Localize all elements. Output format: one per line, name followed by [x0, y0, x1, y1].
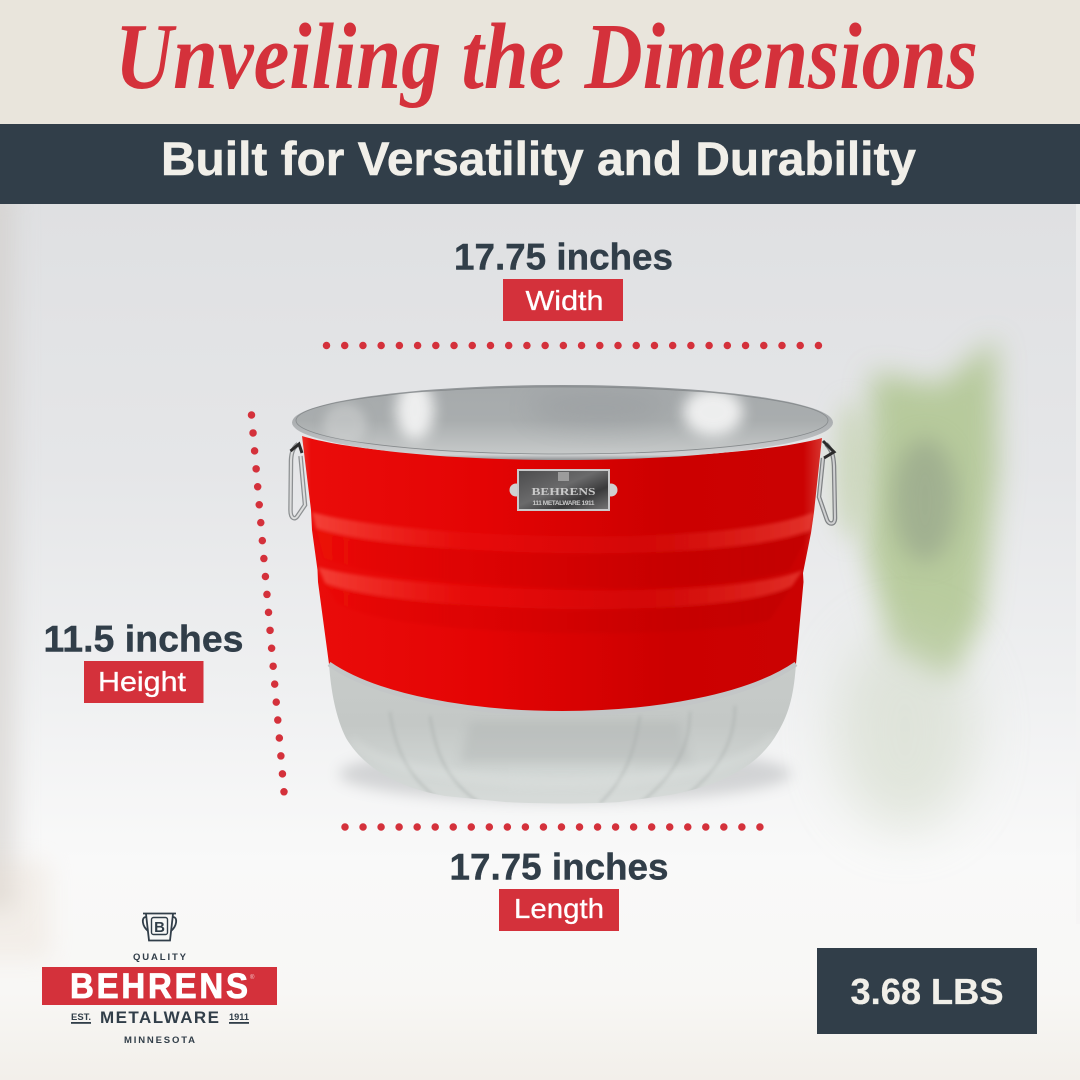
bucket — [290, 380, 835, 810]
name plate — [510, 470, 618, 510]
weight badge — [817, 948, 1037, 1034]
icon: bucket logo — [143, 914, 176, 940]
weight badge: 3.68 LBS — [850, 971, 1004, 1012]
height value: 11.5 inches — [44, 618, 244, 660]
brand logo: BEHRENS — [70, 967, 248, 1006]
subtitle: Built for Versatility and Durability — [161, 132, 916, 185]
brand logo: ® — [250, 974, 255, 981]
brand logo: METALWARE — [100, 1008, 219, 1027]
icon: bucket logo: B — [154, 919, 165, 936]
width dotted line — [326, 342, 818, 349]
brand logo: 1911 — [229, 1012, 249, 1022]
length label: Length — [514, 893, 604, 924]
galvanized base — [329, 667, 796, 804]
quality text: QUALITY — [133, 952, 187, 963]
right handle — [819, 441, 835, 524]
header band — [0, 0, 1080, 124]
rib highlights — [312, 511, 814, 608]
height label: Height — [98, 666, 186, 697]
width dimension — [326, 236, 818, 346]
rim — [292, 385, 833, 460]
width label: Width — [526, 285, 604, 316]
bucket shadow — [339, 746, 791, 802]
base rim band — [329, 664, 796, 714]
length label — [499, 889, 619, 931]
width label — [503, 279, 623, 321]
red painted body — [295, 430, 830, 725]
established line: EST. — [71, 1012, 91, 1022]
left handle — [290, 444, 305, 518]
name plate: BEHRENS — [532, 486, 596, 498]
length dimension — [345, 827, 760, 931]
behrens red band — [42, 967, 277, 1005]
length dotted line — [345, 823, 760, 831]
height dimension — [44, 415, 284, 792]
width value: 17.75 inches — [454, 236, 673, 278]
brand logo — [42, 914, 277, 1046]
minnesota text: MINNESOTA — [124, 1035, 195, 1046]
name plate: 111 METALWARE 1911 — [532, 500, 595, 507]
inner reflections — [322, 391, 750, 445]
length value: 17.75 inches — [450, 846, 668, 888]
subtitle band — [0, 124, 1080, 204]
height dotted line — [252, 415, 284, 792]
height label — [84, 661, 204, 703]
